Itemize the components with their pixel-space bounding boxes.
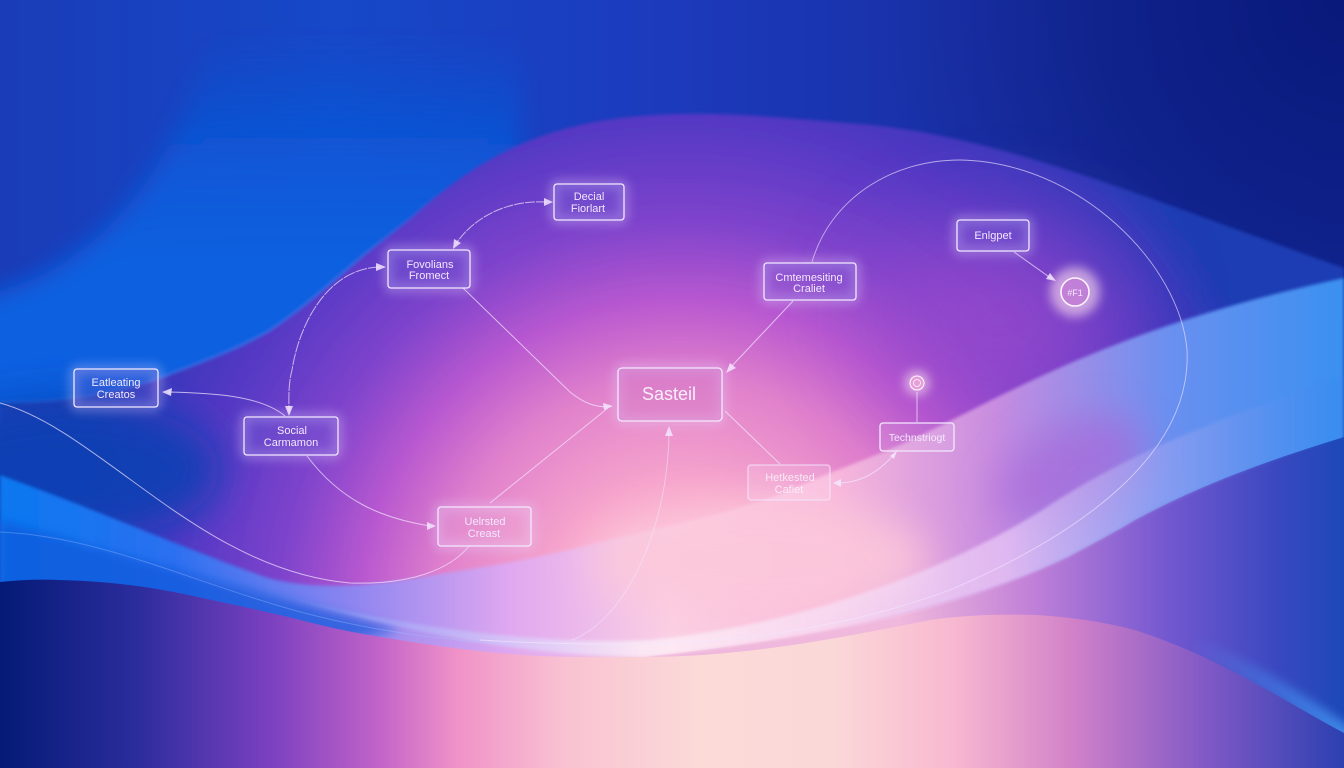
background: front bottom wave [0, 580, 1344, 768]
node: Uelrsted Creast: Uelrsted [465, 516, 505, 528]
node: glowing circle: #F1 [1067, 288, 1083, 298]
connector: Decial to Fovolians [453, 198, 553, 249]
node: Decial Fiorlart [554, 184, 624, 220]
node: Decial Fiorlart: Fiorlart [571, 203, 605, 215]
node: Sasteil central: Sasteil [642, 384, 696, 404]
background: purple shade under wave crest [978, 393, 1162, 547]
node: Eatleating Creatos [74, 369, 158, 407]
connector: Social to Uelrsted [307, 456, 436, 530]
node: Technstriogt [880, 423, 954, 451]
node: Cmtemesiting Craliet [764, 263, 856, 300]
node: Cmtemesiting Craliet: Cmtemesiting [775, 272, 843, 284]
node: Decial Fiorlart: Decial [574, 191, 604, 203]
background: thin line in blue band [0, 532, 520, 645]
node: Enlgpet [957, 220, 1029, 251]
background: right dark wedge [644, 437, 1344, 760]
background: blue shade lower left [0, 400, 220, 540]
connector: Technstriogt to Hetkested [833, 451, 897, 487]
background: blue edge highlight at lower right [1190, 645, 1344, 738]
node: Uelrsted Creast: Creast [468, 528, 500, 540]
node: Eatleating Creatos: Eatleating [92, 377, 140, 389]
background: luminous ribbon [260, 375, 1344, 657]
node: Uelrsted Creast [438, 507, 531, 546]
node: small glowing circle [904, 370, 930, 396]
background: top-left bright blue swirl [0, 30, 520, 430]
background: upper flowing wave [0, 278, 1344, 768]
background: purple glow right [870, 230, 1130, 410]
node: Hetkested Cafiet: Hetkested [765, 472, 815, 484]
node: Cmtemesiting Craliet: Craliet [793, 283, 825, 295]
connector: Sasteil to Hetkested [725, 411, 780, 464]
node: Hetkested Cafiet: Cafiet [775, 484, 803, 496]
node: Social Carmamon: Carmamon [264, 437, 318, 449]
node: Technstriogt: Technstriogt [889, 432, 945, 444]
node: Fovolians Fromect: Fovolians [406, 259, 454, 271]
connector: lower curve to Sasteil [572, 426, 673, 640]
node: Hetkested Cafiet [748, 465, 830, 500]
background: blue band shading at left [0, 520, 400, 650]
connector: Enlgpet to glow circle [1014, 252, 1056, 281]
node: Enlgpet: Enlgpet [974, 230, 1012, 242]
connector: Social to Eatleating [162, 388, 285, 416]
connector: Fovolians to Sasteil [463, 288, 613, 410]
node: Fovolians Fromect [388, 250, 470, 288]
connector: Cmtemesiting to Sasteil [726, 301, 793, 373]
node: Eatleating Creatos: Creatos [97, 389, 136, 401]
node: Social Carmamon [244, 417, 338, 455]
connector: Uelrsted to Sasteil [490, 408, 608, 503]
background: pink glow inside wave [590, 500, 930, 620]
node: Sasteil central [618, 368, 722, 421]
node: Social Carmamon: Social [277, 425, 307, 437]
connector: Fovolians to Social [285, 263, 386, 416]
connector: large loop [480, 160, 1187, 644]
connector: long left curve [0, 403, 470, 583]
background: edge highlight of purple field [0, 176, 460, 402]
connector: small circle to Technstriogt [916, 392, 918, 422]
node: glowing circle [1050, 267, 1100, 317]
node: Fovolians Fromect: Fromect [409, 270, 449, 282]
